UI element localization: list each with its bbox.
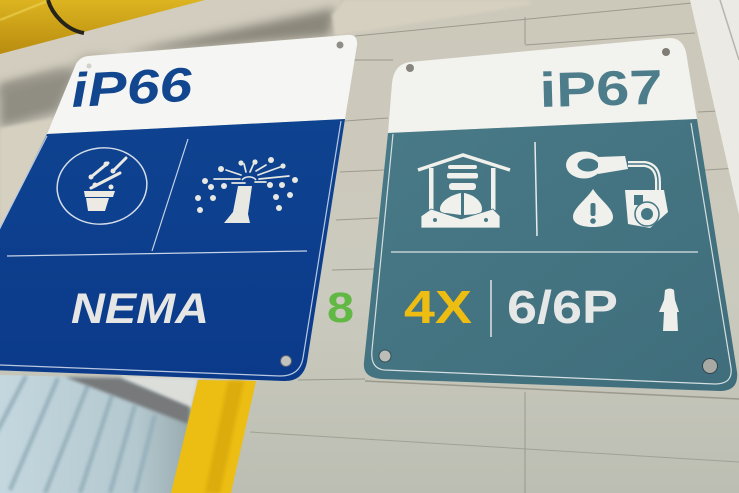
panel: IP66 sign: [0, 35, 357, 381]
IP66 blue body: [0, 119, 345, 381]
icon: shelter with boat: [418, 155, 510, 228]
yellow pipe top: [0, 0, 205, 54]
icon: water drop warning: [573, 189, 613, 227]
label: NEMA: NEMA: [71, 285, 209, 333]
icon: person: [659, 288, 679, 331]
IP66 white header: [47, 35, 357, 134]
icon: sensor with cable: [566, 152, 668, 228]
icon: circled dust symbol: [52, 142, 152, 230]
screw: [702, 358, 718, 374]
IP67 teal body: [364, 119, 737, 391]
number: 8: 8: [327, 284, 354, 332]
divider: [535, 142, 537, 236]
divider: [391, 251, 698, 253]
panel: IP67 sign: [364, 38, 737, 391]
icon: water spray nozzle: [195, 157, 298, 223]
screw: [379, 350, 391, 362]
screw: [280, 356, 292, 366]
IP67 white header: [388, 38, 697, 133]
screw: [406, 64, 414, 72]
screw: [336, 42, 344, 48]
screw: [86, 64, 92, 68]
divider: [490, 280, 492, 337]
lower left window: [0, 375, 198, 493]
pipe clamp: [48, 0, 84, 33]
divider: [7, 251, 307, 256]
label: 6/6P: 6/6P: [507, 281, 618, 333]
IP66 border line: [0, 121, 341, 376]
yellow vertical pipe: [171, 380, 256, 493]
divider: [152, 139, 188, 251]
screw: [662, 48, 670, 56]
heading: IP67: iP67: [539, 61, 663, 118]
white window frame: [690, 0, 739, 215]
heading: IP66: iP66: [70, 59, 194, 118]
label: 4X: 4X: [404, 281, 472, 333]
IP67 border line: [372, 123, 731, 384]
